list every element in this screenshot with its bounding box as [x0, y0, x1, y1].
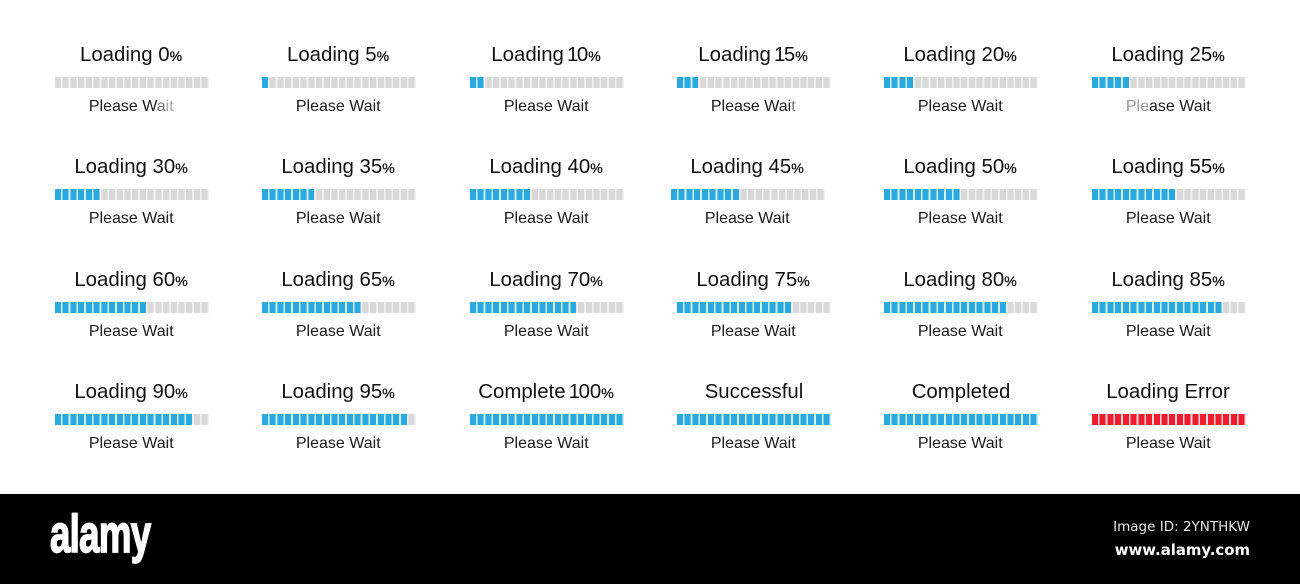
- progress: Loading 25%: Please Wait: [1126, 98, 1211, 115]
- progress: Loading 65%: [262, 269, 416, 340]
- progress: Complete 100%: Complete 100%: [478, 381, 614, 403]
- progress: Loading 60%: Loading 60%: [74, 269, 188, 291]
- progress: Successful: [677, 381, 831, 452]
- progress: Complete 100%: [470, 381, 624, 452]
- progress: Loading 35%: Loading 35%: [281, 156, 395, 178]
- progress: Loading 45%: Loading 45%: [690, 156, 804, 178]
- progress: Loading 20%: Loading 20%: [903, 44, 1017, 66]
- progress: Successful: Please Wait: [711, 435, 796, 452]
- progress: Loading 90%: [55, 381, 209, 452]
- progress: Loading 45%: Please Wait: [705, 210, 790, 227]
- progress: Loading 70%: Loading 70%: [489, 269, 603, 291]
- progress: Loading 15%: Loading 15%: [698, 44, 808, 66]
- progress: Loading 55%: Please Wait: [1126, 210, 1211, 227]
- progress: Loading 35%: Please Wait: [296, 210, 381, 227]
- progress: Loading 30%: [55, 156, 209, 227]
- progress: Loading 15%: Please Wait: [711, 98, 796, 115]
- progress: Loading 40%: Please Wait: [504, 210, 589, 227]
- progress: Loading 50%: [884, 156, 1038, 227]
- progress: Loading 60%: [55, 269, 209, 340]
- progress: Loading 80%: Loading 80%: [903, 269, 1017, 291]
- progress: Loading 70%: [470, 269, 624, 340]
- progress: Loading 15%: [677, 44, 831, 115]
- progress: Loading 25%: [1092, 44, 1246, 115]
- logo: alamy: alamy: [50, 505, 150, 564]
- progress: Loading 90%: Please Wait: [89, 435, 174, 452]
- progress: Loading 25%: Loading 25%: [1111, 44, 1225, 66]
- progress: Loading Error: [1092, 381, 1246, 452]
- progress: Loading 40%: [470, 156, 624, 227]
- footer bar: [0, 494, 1300, 584]
- progress: Loading 55%: [1092, 156, 1246, 227]
- progress: Loading 5%: [262, 44, 416, 115]
- image id: Image ID: 2YNTHKW: [1113, 519, 1250, 535]
- progress: Loading 0%: Loading 0%: [80, 44, 182, 66]
- progress: Completed: Completed: [912, 381, 1010, 403]
- progress: Loading 10%: [470, 44, 624, 115]
- progress: Loading 50%: Loading 50%: [903, 156, 1017, 178]
- progress: Loading 20%: [884, 44, 1038, 115]
- progress: Loading 40%: Loading 40%: [489, 156, 603, 178]
- progress: Complete 100%: Please Wait: [504, 435, 589, 452]
- progress: Loading 80%: [884, 269, 1038, 340]
- progress: Loading 45%: [671, 156, 825, 227]
- progress: Loading 65%: Please Wait: [296, 323, 381, 340]
- progress: Loading 70%: Please Wait: [504, 323, 589, 340]
- website: www.alamy.com: [1115, 541, 1250, 559]
- progress: Loading 35%: [262, 156, 416, 227]
- progress: Completed: Please Wait: [918, 435, 1003, 452]
- progress: Loading 30%: Please Wait: [89, 210, 174, 227]
- progress: Loading 10%: Loading 10%: [491, 44, 601, 66]
- progress: Loading 80%: Please Wait: [918, 323, 1003, 340]
- progress: Loading 55%: Loading 55%: [1111, 156, 1225, 178]
- progress: Loading 0%: [55, 44, 209, 115]
- progress: Loading 65%: Loading 65%: [281, 269, 395, 291]
- progress: Loading 50%: Please Wait: [918, 210, 1003, 227]
- progress: Loading 85%: Loading 85%: [1111, 269, 1225, 291]
- progress: Loading 60%: Please Wait: [89, 323, 174, 340]
- progress: Loading 5%: Loading 5%: [287, 44, 389, 66]
- progress: Loading Error: Please Wait: [1126, 435, 1211, 452]
- progress: Loading 5%: Please Wait: [296, 98, 381, 115]
- progress: Loading 85%: Please Wait: [1126, 323, 1211, 340]
- progress: Loading 30%: Loading 30%: [74, 156, 188, 178]
- progress: Loading 95%: [262, 381, 416, 452]
- progress: Loading 85%: [1092, 269, 1246, 340]
- progress: Loading 90%: Loading 90%: [74, 381, 188, 403]
- progress: Loading 95%: Loading 95%: [281, 381, 395, 403]
- progress: Loading Error: Loading Error: [1106, 381, 1230, 403]
- progress: Loading 95%: Please Wait: [296, 435, 381, 452]
- progress: Successful: Successful: [705, 381, 803, 403]
- progress: Loading 0%: Please Wait: [89, 98, 174, 115]
- progress: Loading 75%: [677, 269, 831, 340]
- progress: Completed: [884, 381, 1038, 452]
- progress: Loading 20%: Please Wait: [918, 98, 1003, 115]
- progress: Loading 10%: Please Wait: [504, 98, 589, 115]
- progress: Loading 75%: Loading 75%: [696, 269, 810, 291]
- progress: Loading 75%: Please Wait: [711, 323, 796, 340]
